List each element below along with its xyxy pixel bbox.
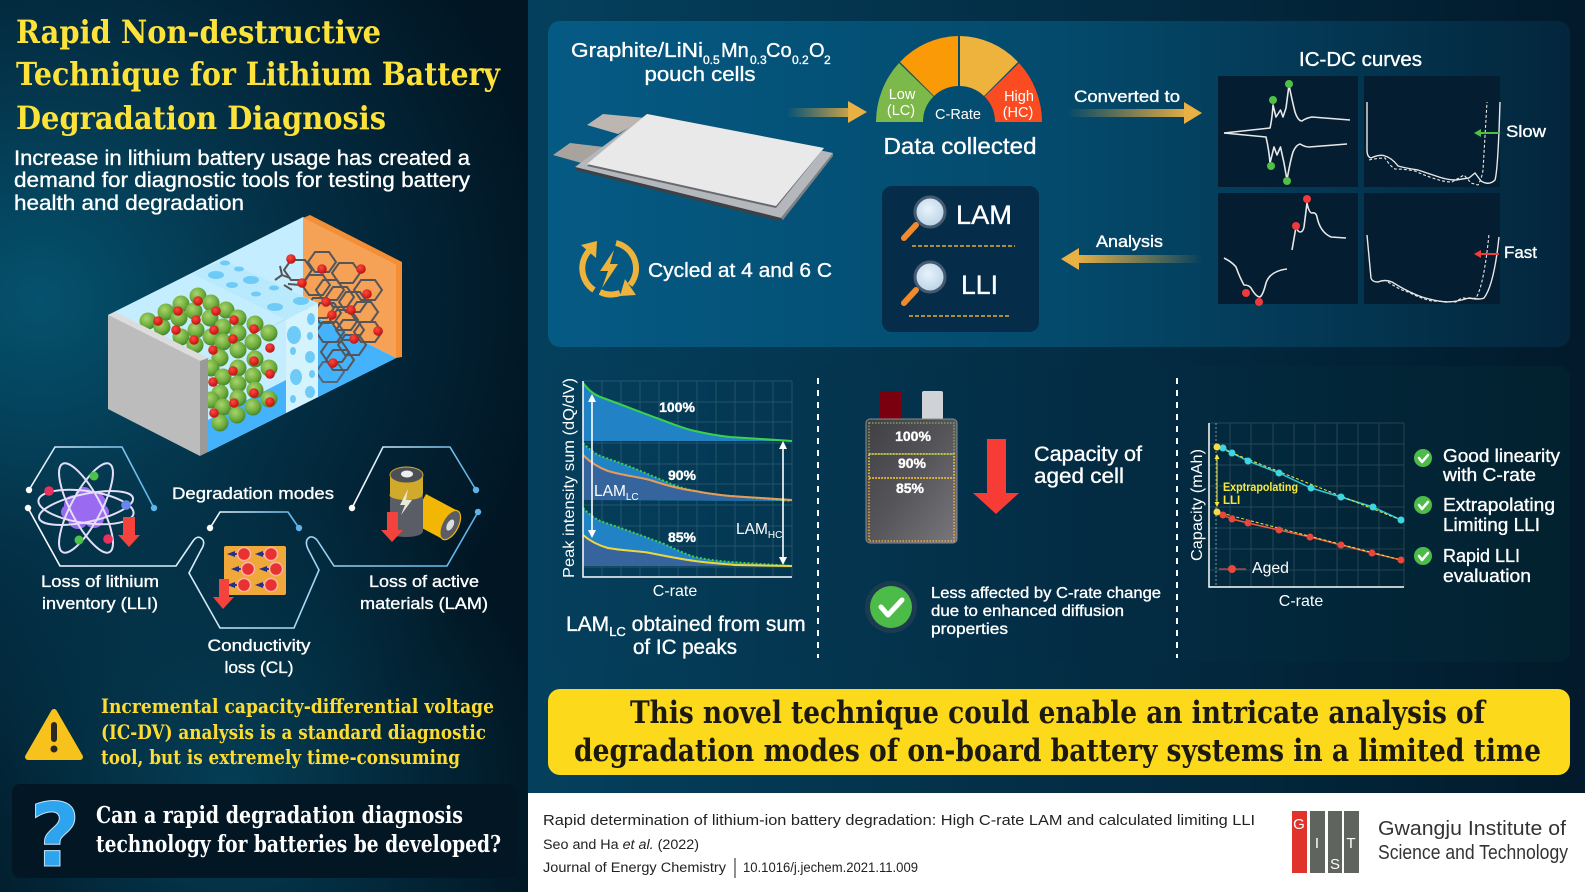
left column <box>12 13 517 887</box>
chart: peak intensity vs C-rate: LAM <box>594 483 626 500</box>
aged cell battery: 85% <box>896 480 925 496</box>
cycling icon <box>581 241 636 296</box>
chart: capacity vs C-rate <box>1189 423 1404 610</box>
IC-DC heading: IC-DC curves <box>1299 49 1422 71</box>
chart caption: obtained from sum <box>626 613 806 636</box>
diffusion note: due to enhanced diffusion <box>931 603 1124 620</box>
IC-DC plots <box>1218 76 1500 306</box>
cell chemistry label: O <box>809 40 825 62</box>
cell chemistry label: Mn <box>721 40 749 62</box>
chart: peak intensity vs C-rate <box>561 378 792 600</box>
diffusion note: properties <box>931 621 1008 638</box>
title: Rapid Non-destructive <box>16 13 381 51</box>
question box: Can a rapid degradation diagnosis <box>96 802 463 829</box>
separator <box>193 260 318 413</box>
diffusion note <box>931 585 1161 638</box>
benefits list <box>1414 445 1561 586</box>
warning text: tool, but is extremely time-consuming <box>101 745 460 769</box>
cell chemistry label: 0.5 <box>703 53 720 67</box>
aged cell battery: 90% <box>898 455 927 471</box>
converted to arrow <box>1067 87 1202 124</box>
degradation mode labels: Conductivity <box>208 636 311 655</box>
benefits list: evaluation <box>1443 565 1531 586</box>
red down arrow <box>973 439 1019 514</box>
benefits list: Rapid LLI <box>1443 545 1520 566</box>
chart: peak intensity vs C-rate: C-rate <box>653 583 697 600</box>
chart: peak intensity vs C-rate: 90% <box>668 467 697 483</box>
benefits list: Good linearity <box>1443 445 1561 466</box>
slow label with arrow: Slow <box>1506 122 1547 141</box>
chart: capacity vs C-rate: C-rate <box>1279 593 1323 610</box>
fast label with arrow <box>1474 243 1537 262</box>
chart: capacity vs C-rate: Aged <box>1252 560 1289 577</box>
citation: Seo and Ha et al. (2022) <box>543 837 699 852</box>
benefits list: Extrapolating <box>1443 494 1555 515</box>
degradation mode frames <box>25 447 481 628</box>
cell chemistry label: pouch cells <box>644 64 756 86</box>
GIST logo: I <box>1315 835 1319 852</box>
footer <box>528 793 1585 892</box>
chart: capacity vs C-rate: LLI <box>1223 495 1240 507</box>
capacity label: Capacity of <box>1034 443 1142 466</box>
intro text <box>14 147 471 215</box>
C-rate gauge: High <box>1004 89 1034 105</box>
chart: peak intensity vs C-rate: 100% <box>659 399 695 415</box>
icon: conductivity grid with down arrow <box>213 546 286 609</box>
orange current collector <box>303 215 402 358</box>
chart caption: LAM <box>566 613 609 636</box>
chart caption <box>566 613 806 659</box>
plot: fast IC <box>1218 193 1358 306</box>
chart: peak intensity vs C-rate: 85% <box>668 529 697 545</box>
cell chemistry label <box>571 40 831 86</box>
analysis arrow: Analysis <box>1096 232 1163 251</box>
C-rate gauge: (LC) <box>887 103 915 119</box>
citation: 10.1016/j.jechem.2021.11.009 <box>743 860 918 875</box>
GIST logo <box>1292 811 1568 873</box>
chart: peak intensity vs C-rate: LAM <box>736 521 768 538</box>
panel: workflow <box>548 21 1570 347</box>
aged cell battery <box>866 391 957 543</box>
citation: Journal of Energy Chemistry <box>543 860 726 875</box>
benefits list: with C-rate <box>1442 464 1536 485</box>
title: Degradation Diagnosis <box>16 99 386 137</box>
C-rate gauge: C-Rate <box>935 107 981 123</box>
arrow to gauge <box>787 101 867 123</box>
analysis arrow <box>1061 232 1202 270</box>
active material spheres <box>140 288 278 432</box>
cell chemistry label: 0.3 <box>750 53 767 67</box>
graphene anode <box>275 252 383 382</box>
plot: slow DC <box>1364 76 1500 187</box>
GIST logo: T <box>1346 835 1356 852</box>
icon: atom with down arrow <box>36 457 140 559</box>
icon: batteries with down arrow <box>381 467 465 543</box>
slow label with arrow <box>1474 122 1547 141</box>
title <box>16 13 501 137</box>
cell chemistry label: 2 <box>824 53 831 67</box>
cell chemistry label: 0.2 <box>792 53 809 67</box>
chart caption: LC <box>609 624 626 639</box>
plot: fast DC <box>1364 193 1500 304</box>
C-rate gauge <box>876 36 1042 123</box>
degradation mode labels: Degradation modes <box>172 484 334 503</box>
icon: question mark: ? <box>29 784 81 887</box>
fast label with arrow: Fast <box>1504 243 1537 262</box>
icon: warning triangle <box>28 712 80 757</box>
chart: peak intensity vs C-rate: LC <box>626 492 639 503</box>
LAM and LLI box: LLI <box>961 270 998 300</box>
converted to arrow: Converted to <box>1074 87 1180 106</box>
question box <box>12 784 517 887</box>
pouch cell illustration <box>553 114 833 221</box>
icon: green check <box>865 581 917 633</box>
diffusion note: Less affected by C-rate change <box>931 585 1161 602</box>
data collected label: Data collected <box>884 133 1036 159</box>
warning text <box>101 694 494 769</box>
degradation mode labels: Loss of active <box>369 572 479 591</box>
battery cross-section illustration <box>108 215 402 456</box>
conclusion banner <box>548 689 1570 775</box>
GIST logo: G <box>1293 816 1305 833</box>
intro text: health and degradation <box>14 192 244 215</box>
icon: magnifier LAM <box>904 197 945 238</box>
cell chemistry label: Graphite/LiNi <box>571 40 703 62</box>
LAM and LLI box <box>882 186 1039 332</box>
chart: peak intensity vs C-rate: Peak intensity sum (dQ/dV) <box>561 378 578 578</box>
aged cell battery: 100% <box>895 428 931 444</box>
grey cathode end plate <box>108 312 208 456</box>
panel: results <box>548 366 1570 662</box>
chart caption: of IC peaks <box>633 636 737 659</box>
degradation mode labels: inventory (LLI) <box>42 594 158 613</box>
C-rate gauge: (HC) <box>1003 105 1033 121</box>
degradation mode labels: Loss of lithium <box>41 572 159 591</box>
title: Technique for Lithium Battery <box>16 55 501 93</box>
chart: capacity vs C-rate: Capacity (mAh) <box>1189 449 1206 561</box>
cycling label: Cycled at 4 and 6 C <box>648 260 832 282</box>
benefits list: Limiting LLI <box>1443 514 1540 535</box>
degradation mode labels <box>41 484 488 677</box>
plot: slow IC <box>1218 76 1358 187</box>
chart: capacity vs C-rate: Exptrapolating <box>1223 482 1298 494</box>
LAM and LLI box: LAM <box>956 200 1012 230</box>
question box: technology for batteries be developed? <box>96 831 501 858</box>
capacity label <box>1034 443 1142 488</box>
intro text: demand for diagnostic tools for testing battery <box>14 169 471 192</box>
GIST logo: S <box>1330 856 1340 873</box>
degradation mode labels: loss (CL) <box>224 658 294 677</box>
warning text: (IC-DV) analysis is a standard diagnostic <box>101 720 486 744</box>
citation <box>543 812 1255 878</box>
intro text: Increase in lithium battery usage has created a <box>14 147 470 170</box>
icon: magnifier LLI <box>904 262 945 303</box>
chart: peak intensity vs C-rate: HC <box>768 530 782 541</box>
capacity label: aged cell <box>1034 465 1124 488</box>
citation: Rapid determination of lithium-ion battery degradation: High C-rate LAM and calculated limiting LLI <box>543 812 1255 829</box>
warning text: Incremental capacity-differential voltage <box>101 694 494 718</box>
C-rate gauge: Low <box>889 87 916 103</box>
GIST logo: Gwangju Institute of <box>1378 818 1566 840</box>
degradation mode labels: materials (LAM) <box>360 594 488 613</box>
cell chemistry label: Co <box>766 40 792 62</box>
